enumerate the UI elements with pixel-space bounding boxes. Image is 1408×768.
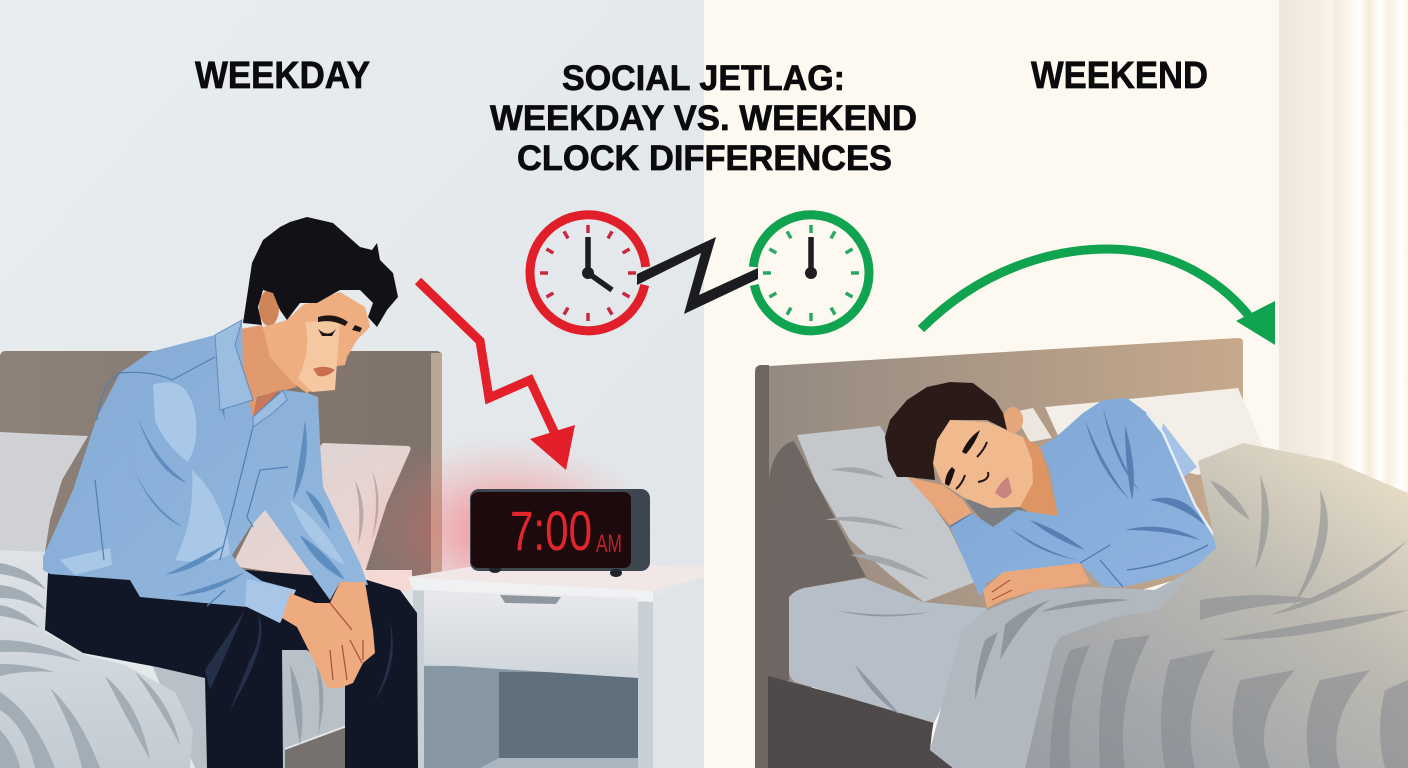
shirt xyxy=(950,398,1215,597)
heading: weekday: WEEKDAY xyxy=(195,55,370,97)
mattress xyxy=(150,648,347,768)
hand under head xyxy=(907,477,972,525)
mattress xyxy=(789,578,987,723)
blanket flap xyxy=(930,570,1192,768)
red falling arrow xyxy=(418,281,575,470)
collar xyxy=(215,320,287,427)
shirt seams xyxy=(95,357,288,606)
bed base xyxy=(285,727,347,768)
shirt folds xyxy=(125,350,345,596)
panel: weekday scene xyxy=(0,217,704,768)
sleeping facial features xyxy=(945,430,988,489)
shirt highlights xyxy=(60,382,345,575)
ear xyxy=(259,290,279,326)
am label: AM xyxy=(596,530,622,558)
panel: weekend background xyxy=(704,0,1408,768)
title: CLOCK DIFFERENCES xyxy=(517,139,892,178)
blanket xyxy=(930,443,1408,768)
resting hand xyxy=(983,563,1090,608)
face xyxy=(933,420,1033,508)
nightstand xyxy=(408,565,704,768)
pillow folds xyxy=(825,467,930,580)
headboard xyxy=(0,351,442,576)
shirt back xyxy=(1160,423,1197,480)
black zigzag connector xyxy=(637,237,758,314)
face highlight xyxy=(298,320,340,392)
cuff xyxy=(245,579,296,623)
shoulder rim light xyxy=(1147,413,1215,537)
hair xyxy=(885,382,1007,480)
red clock: weekday xyxy=(530,215,646,331)
trousers xyxy=(45,570,418,768)
mattress folds xyxy=(835,610,930,715)
panel: weekend scene xyxy=(755,249,1408,768)
facial features xyxy=(313,315,362,376)
title: WEEKDAY VS. WEEKEND xyxy=(490,99,917,138)
shirt xyxy=(43,320,368,623)
pillow creases xyxy=(355,470,378,545)
green clock: weekend xyxy=(753,215,869,331)
sleeve seams xyxy=(950,513,1208,587)
headboard xyxy=(755,338,1243,768)
shirt folds xyxy=(1010,408,1205,560)
mattress folds xyxy=(290,660,323,745)
bed frame xyxy=(768,676,953,768)
heading: weekend: WEEKEND xyxy=(1031,55,1208,97)
title: SOCIAL JETLAG: xyxy=(562,59,845,98)
pillow left xyxy=(0,432,88,552)
alarm glow xyxy=(355,435,655,625)
neck xyxy=(1020,437,1058,517)
mattress corner xyxy=(362,570,412,592)
hair xyxy=(243,217,398,327)
title xyxy=(490,59,917,178)
small pillow xyxy=(1013,408,1052,442)
shadow under chin xyxy=(965,500,1040,530)
trouser folds xyxy=(205,610,393,710)
lips xyxy=(995,477,1012,498)
neck shadow xyxy=(253,390,280,417)
ear xyxy=(1003,407,1023,433)
hands xyxy=(282,582,375,688)
neck xyxy=(235,325,297,417)
pillow right xyxy=(232,443,411,576)
panel: weekday background xyxy=(0,0,704,768)
time display: 7:00 xyxy=(510,499,592,562)
window curtain xyxy=(1279,0,1408,768)
blanket folds xyxy=(1050,475,1408,768)
green arrow xyxy=(921,249,1275,345)
back pillow xyxy=(1045,388,1263,475)
grey pillow xyxy=(797,426,975,602)
flap folds xyxy=(975,599,1130,700)
person: weekend, sleeping xyxy=(885,382,1215,608)
digital alarm clock xyxy=(470,489,650,577)
person: weekday, sitting xyxy=(43,217,418,768)
face xyxy=(263,292,370,393)
blanket xyxy=(0,550,193,768)
